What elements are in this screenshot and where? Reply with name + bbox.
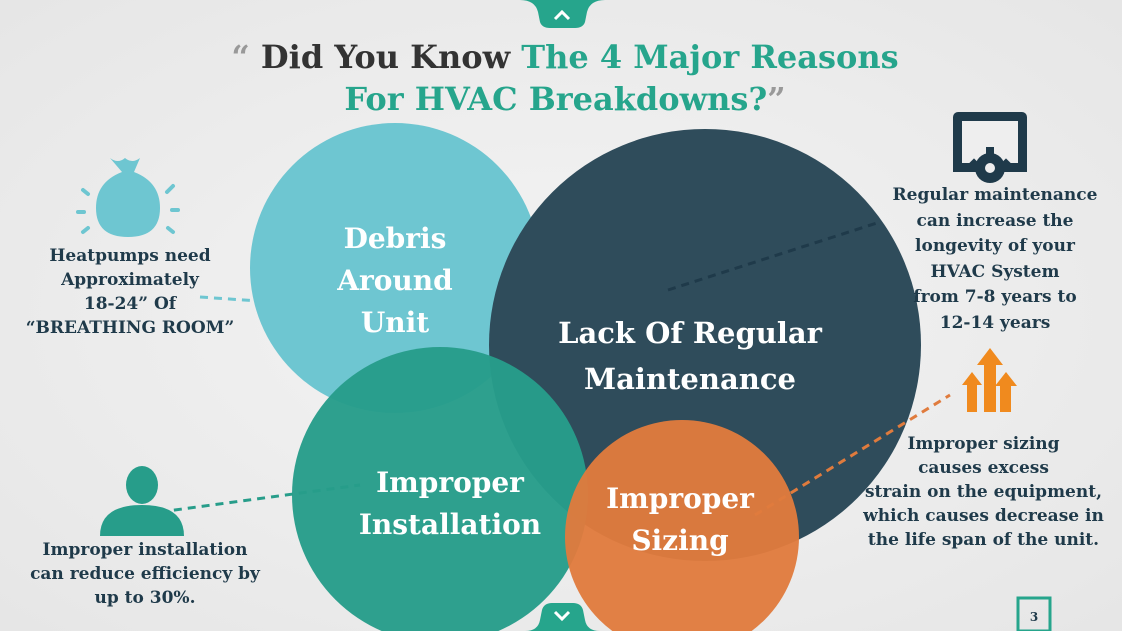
title: For HVAC Breakdowns?” (344, 80, 786, 118)
icon: bag (78, 158, 178, 237)
text: heatpumps (26, 246, 234, 338)
label: installation: Improper (376, 466, 524, 499)
text: maintenance: longevity of your (915, 236, 1075, 256)
text: installation (30, 540, 260, 608)
text: sizing: Improper sizing (907, 434, 1060, 454)
text: sizing: which causes decrease in (863, 506, 1104, 526)
circle: maintenance (489, 129, 921, 561)
text: maintenance: HVAC System (931, 262, 1059, 282)
text: heatpumps: “BREATHING ROOM” (26, 318, 234, 338)
text: heatpumps: Approximately (61, 270, 199, 290)
circle: installation (292, 347, 588, 631)
text: installation: Improper installation (43, 540, 247, 560)
label: debris: Unit (361, 306, 429, 339)
label: debris (337, 222, 453, 339)
text: sizing: causes excess (918, 458, 1049, 478)
label: installation: Installation (359, 508, 541, 541)
text: maintenance: from 7-8 years to (913, 287, 1077, 307)
text: maintenance: Regular maintenance (893, 185, 1097, 205)
label: maintenance: Lack Of Regular (558, 316, 822, 350)
label: sizing: Improper (606, 482, 754, 515)
label: sizing (606, 482, 754, 557)
title (231, 38, 899, 118)
label: maintenance: Maintenance (584, 362, 796, 396)
text: maintenance: can increase the (917, 210, 1073, 230)
text: sizing (862, 434, 1104, 550)
page number: 3 (1030, 610, 1038, 624)
text: heatpumps: Heatpumps need (49, 246, 211, 266)
top tab (520, 0, 605, 28)
circle: debris (250, 123, 540, 413)
circle: sizing (565, 420, 799, 631)
text: installation: up to 30%. (94, 588, 196, 608)
text: sizing: the life span of the unit. (868, 530, 1099, 550)
text: heatpumps: 18-24” Of (84, 294, 176, 314)
title: “ Did You Know The 4 Major Reasons (231, 38, 899, 76)
icon: monitor gear (953, 112, 1027, 183)
label: sizing: Sizing (631, 524, 729, 557)
text: maintenance (893, 185, 1097, 332)
label: debris: Around (337, 264, 453, 297)
text: maintenance: 12-14 years (940, 312, 1050, 332)
label: maintenance (558, 316, 822, 396)
icon: person (100, 466, 184, 536)
bottom tab (525, 603, 600, 631)
text: installation: can reduce efficiency by (30, 564, 260, 584)
icon: arrows (962, 348, 1017, 412)
text: sizing: strain on the equipment, (865, 482, 1102, 502)
label: installation (359, 466, 541, 541)
label: debris: Debris (344, 222, 446, 255)
page icon (1018, 598, 1050, 631)
dashed connectors (160, 222, 950, 515)
